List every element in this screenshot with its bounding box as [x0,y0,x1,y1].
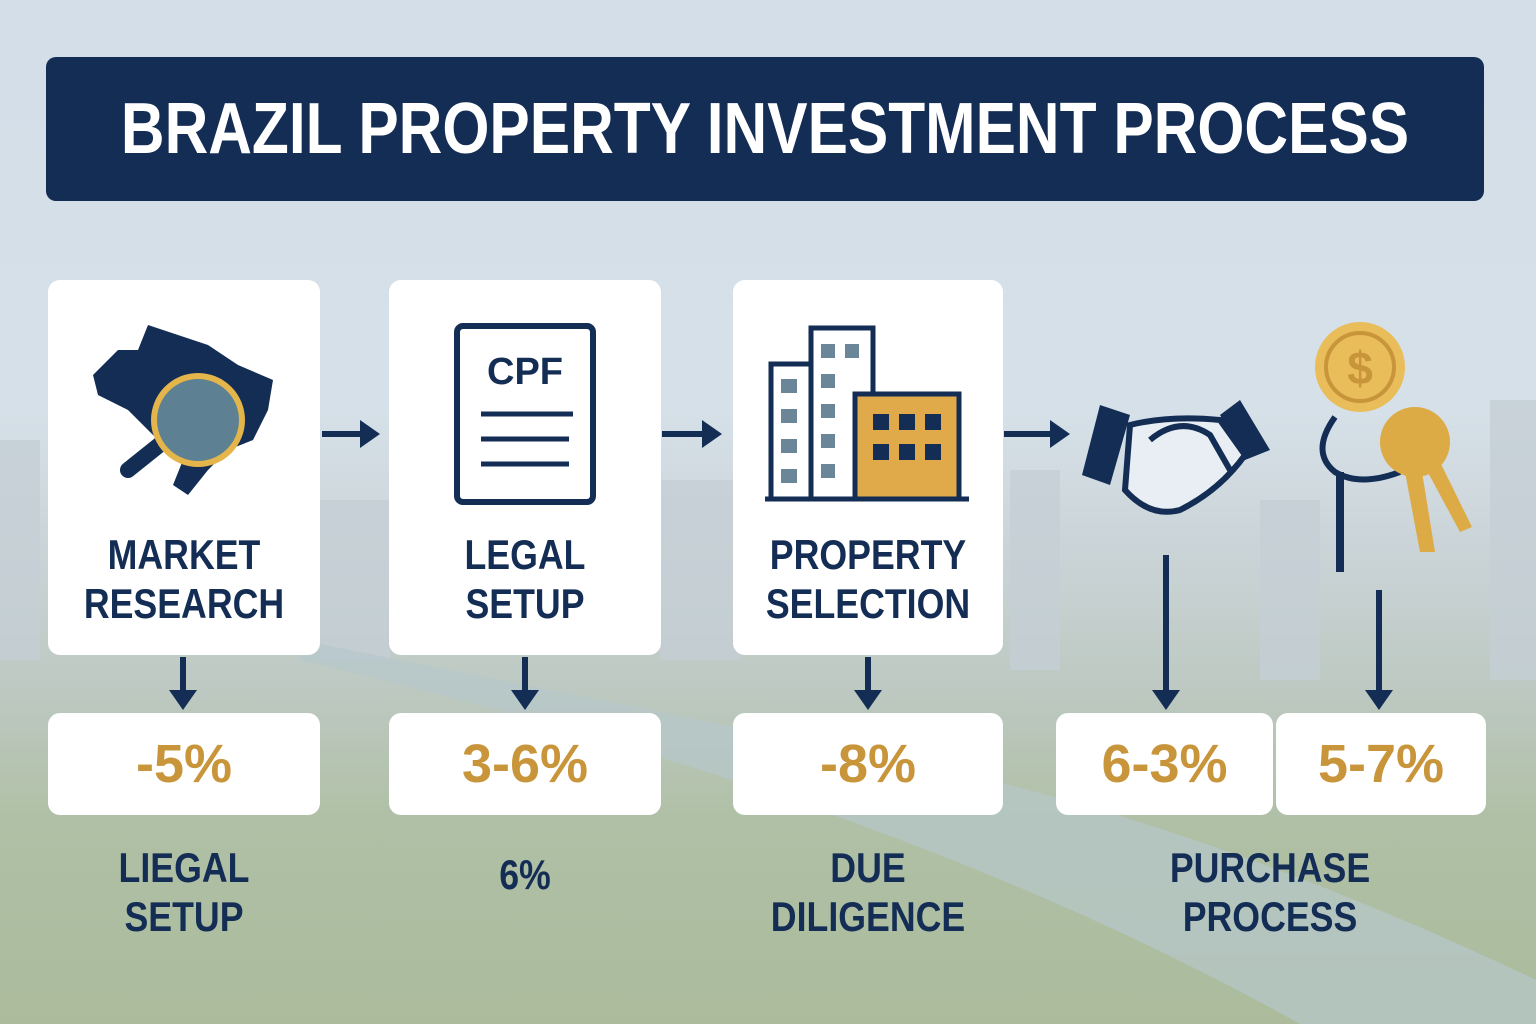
label: RESEARCH [84,580,284,627]
title bar [46,57,1484,201]
label: LEGAL [465,531,585,578]
icon: CPF document [454,323,596,505]
label: MARKET [108,531,260,578]
title bar: BRAZIL PROPERTY INVESTMENT PROCESS [121,89,1409,169]
icon: buildings [765,326,969,502]
label: PROPERTY [770,531,966,578]
panel: legal setup [389,280,661,655]
text: PROCESS [1183,893,1357,940]
icon: CPF document: CPF [487,351,563,393]
panel: property selection [733,280,1003,655]
icon: coin and keys: $ [1347,342,1373,394]
percent boxes [48,713,320,815]
bottom labels [119,844,249,940]
text: 3-6% [462,734,588,794]
icon: handshake [1082,400,1270,515]
label [465,531,585,627]
bottom labels: LIEGAL [119,844,249,891]
label [84,531,284,627]
text: 6-3% [1101,734,1228,794]
percent boxes: -5% [136,734,232,794]
panel: market research [48,280,320,655]
text: DUE [830,844,906,891]
text: PURCHASE [1170,844,1370,891]
text: 5-7% [1318,734,1444,794]
label [766,531,970,627]
label: SETUP [465,580,585,627]
bottom labels: SETUP [124,893,244,940]
icon: coin and keys [1315,322,1472,572]
icon: brazil map with magnifier [93,325,273,495]
text: 6% [499,851,551,898]
text: -8% [820,734,916,794]
text: DILIGENCE [771,893,965,940]
label: SELECTION [766,580,970,627]
